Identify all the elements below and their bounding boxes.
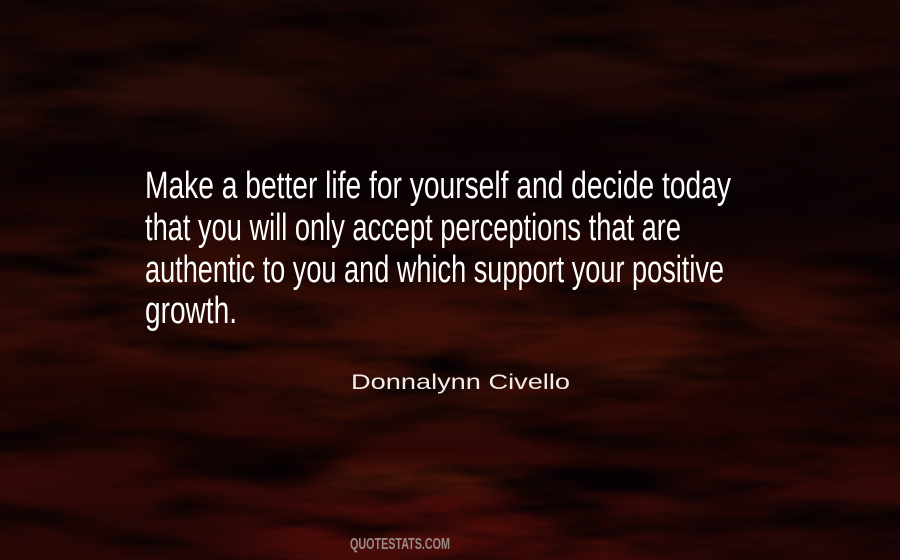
quote text — [145, 165, 731, 332]
author name: Donnalynn Civello — [351, 371, 570, 394]
source watermark: QUOTESTATS.COM — [350, 536, 450, 553]
quote text: that you will only accept perceptions that are — [145, 207, 681, 249]
quote text: growth. — [145, 290, 237, 332]
